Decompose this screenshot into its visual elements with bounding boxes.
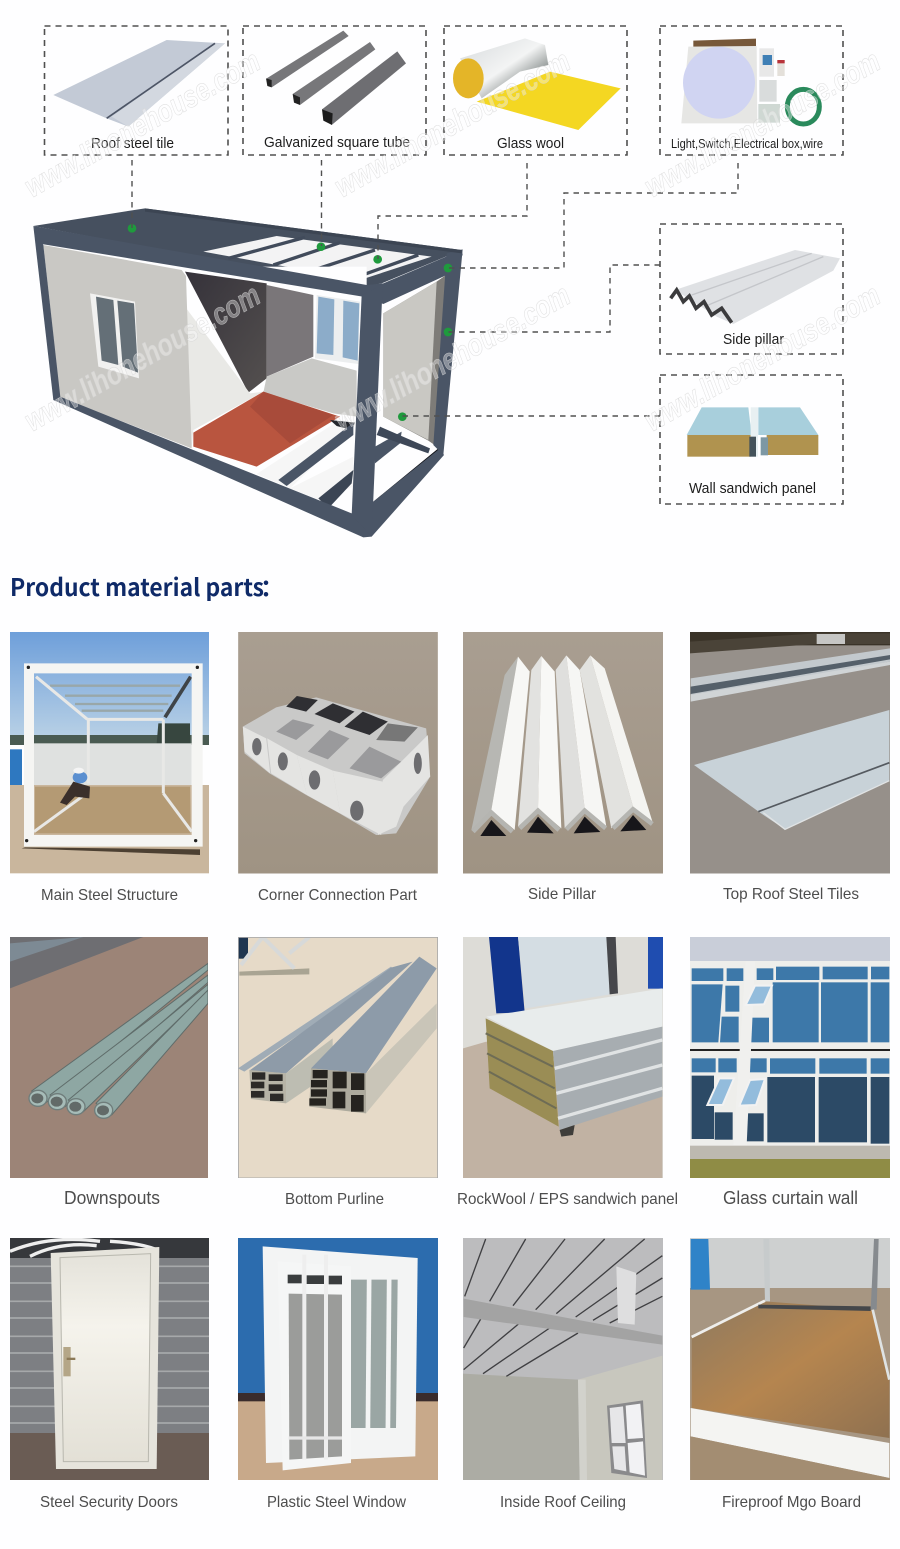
- caption: Top Roof Steel Tiles: [723, 886, 859, 903]
- tile: Top Roof Steel Tiles: [690, 632, 890, 903]
- caption: Bottom Purline: [285, 1191, 384, 1208]
- steel frame: [33, 208, 463, 537]
- tile: Fireproof Mgo Board: [690, 1238, 890, 1511]
- right end wall: [383, 275, 446, 448]
- watermarks: www.lihonehouse.com: [328, 277, 576, 438]
- watermarks: www.lihonehouse.com: [18, 277, 266, 438]
- caption: Plastic Steel Window: [267, 1494, 406, 1511]
- caption: Main Steel Structure: [41, 887, 178, 904]
- watermarks: [18, 43, 886, 438]
- connector: roof steel tile: [131, 160, 133, 228]
- left wall with window: [43, 245, 192, 448]
- connector: glass wool: [378, 163, 527, 259]
- connector: electrical parts: [448, 163, 738, 268]
- caption: Corner Connection Part: [258, 887, 418, 904]
- panel: light, switch, electrical box, wire: [660, 26, 843, 155]
- panel: galvanized square tube: [243, 26, 426, 155]
- panel: roof steel tile: Roof steel tile: [91, 135, 174, 152]
- roof: [33, 208, 462, 287]
- tile: Corner Connection Part: [238, 632, 438, 904]
- container house illustration: [33, 208, 463, 537]
- heading: Product material parts: [10, 568, 264, 603]
- watermarks: www.lihonehouse.com: [18, 43, 266, 204]
- caption: RockWool / EPS sandwich panel: [457, 1191, 678, 1208]
- interior and floor: [180, 267, 430, 515]
- tile: Inside Roof Ceiling: [463, 1238, 663, 1511]
- panel: side pillar: [660, 224, 843, 354]
- panel: wall sandwich panel: [660, 375, 843, 504]
- panel: side pillar: Side pillar: [723, 331, 784, 348]
- tile: Downspouts: [10, 937, 208, 1208]
- panel: wall sandwich panel: Wall sandwich panel: [689, 480, 816, 497]
- watermarks: www.lihonehouse.com: [328, 43, 576, 204]
- tile: RockWool / EPS sandwich panel: [457, 937, 678, 1208]
- connector: wall sandwich panel: [402, 415, 660, 417]
- panel: glass wool: Glass wool: [497, 135, 564, 152]
- caption: Glass curtain wall: [723, 1188, 858, 1208]
- panel: light, switch, electrical box, wire: Light,Switch,Electrical box,wire: [671, 136, 823, 151]
- panel: galvanized square tube: Galvanized square tube: [264, 134, 410, 151]
- panel: glass wool: [444, 26, 627, 155]
- connector: side pillar: [448, 265, 660, 332]
- tile: Plastic Steel Window: [238, 1238, 438, 1511]
- panel: roof steel tile: [44, 26, 228, 155]
- exploded diagram of container house parts: [18, 26, 886, 537]
- caption: Fireproof Mgo Board: [722, 1494, 861, 1511]
- caption: Inside Roof Ceiling: [500, 1494, 626, 1511]
- caption: Steel Security Doors: [40, 1494, 178, 1511]
- caption: Downspouts: [64, 1188, 160, 1208]
- tile: Side Pillar: [463, 632, 663, 903]
- tile: Glass curtain wall: [690, 937, 890, 1208]
- tile: Steel Security Doors: [10, 1238, 209, 1511]
- caption: Side Pillar: [528, 886, 597, 903]
- tile: Main Steel Structure: [10, 632, 209, 904]
- tile: Bottom Purline: [238, 937, 438, 1208]
- heading: ：: [260, 568, 284, 603]
- connector: galvanized square tube: [320, 160, 322, 246]
- black floor frame gap: [373, 448, 442, 508]
- connection points: [128, 224, 452, 421]
